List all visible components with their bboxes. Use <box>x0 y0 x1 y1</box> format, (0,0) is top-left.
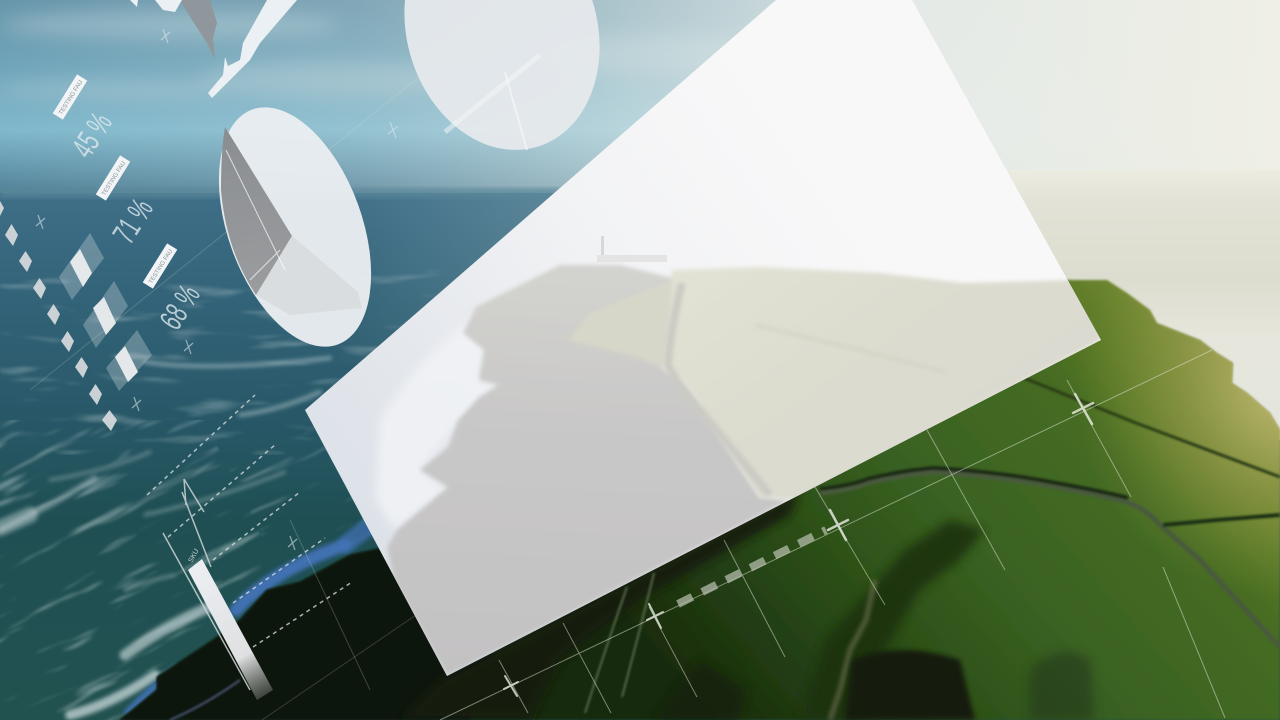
background: sea haze <box>330 193 560 363</box>
highlighted diamond 1 <box>59 233 104 300</box>
stat: 71 percent: TESTING FAU <box>101 161 127 197</box>
bar label: SKU <box>188 548 201 564</box>
background: sky <box>0 0 1280 198</box>
pie chart: upper disc <box>375 0 629 174</box>
headland seen through the sheet: dark cliff side <box>387 265 790 676</box>
bar chart: column with axis <box>163 479 273 700</box>
stat: 68 percent: 68 % <box>153 278 207 336</box>
pale pie wedge <box>256 236 362 315</box>
background: streak across the rock <box>170 680 240 720</box>
bar axis line <box>163 533 250 690</box>
dashed line across the cliff <box>678 530 826 604</box>
bar marker lines <box>182 479 211 567</box>
background: horizon blur <box>0 188 560 198</box>
map fragment: grey island <box>180 0 217 60</box>
background: bottom shadow in the field <box>845 650 975 720</box>
background: blue surf along the shore <box>128 510 390 712</box>
background: sun on the land <box>1040 280 1280 600</box>
stat: 45 percent: 45 % <box>65 106 119 164</box>
stat: 71 percent <box>96 155 160 250</box>
headland seen through the sheet: sunlit field <box>662 267 1101 500</box>
pie segment lines <box>505 72 527 150</box>
background: footpaths and hedges <box>585 378 1280 713</box>
stat: 71 percent: 71 % <box>106 192 160 250</box>
background: clouds <box>0 11 780 98</box>
headland seen through the sheet: olive patch <box>574 324 662 363</box>
background: lower gully <box>1030 652 1095 720</box>
foam seen through the sheet <box>376 334 483 526</box>
stat: 68 percent: TESTING FAU <box>148 249 174 285</box>
background: right-hand sea under the glare <box>900 170 1280 440</box>
background: dark rock <box>120 547 500 720</box>
diamond column <box>0 201 117 431</box>
highlighted diamond 2 <box>83 281 128 348</box>
background: cliff face streak <box>800 520 985 720</box>
panel: translucent white sheet <box>300 0 1110 680</box>
stat: 68 percent <box>143 243 207 336</box>
map fragment: peninsula <box>130 0 297 98</box>
pie divider lines <box>226 150 285 280</box>
small faint crosses on the sea and sky <box>36 29 398 550</box>
crosshair markers <box>504 394 1093 696</box>
background: gully by the bottom path <box>655 660 745 720</box>
background: brown cliff rock <box>830 580 875 720</box>
background: individual foam streaks <box>0 358 330 715</box>
stat: 45 percent <box>53 74 119 164</box>
stat: 45 percent: TESTING FAU <box>58 80 84 116</box>
dashed data lines <box>147 395 352 647</box>
pie chart: lower disc <box>189 87 401 367</box>
background: sky haze towards the sun <box>0 0 1280 198</box>
highlighted diamond 3 <box>106 330 152 391</box>
road and hedge seen through the sheet <box>664 282 772 496</box>
background: headland <box>120 265 1280 720</box>
background: sea foam texture <box>0 272 435 720</box>
grey pie wedge <box>221 127 292 295</box>
pale diagonal glint <box>445 55 540 132</box>
background: dark rock extension below the sheet <box>400 490 800 720</box>
lighthouse seen through the sheet <box>597 236 667 262</box>
map fragment: white islets <box>130 0 182 12</box>
background: sea <box>0 193 1280 720</box>
